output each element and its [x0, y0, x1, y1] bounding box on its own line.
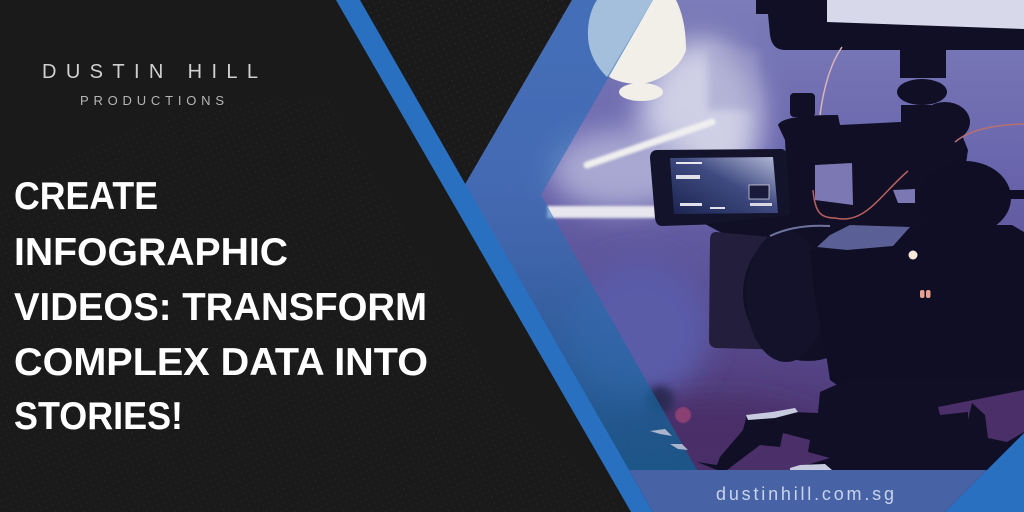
corner triangle	[945, 433, 1024, 512]
overlay highlights	[650, 429, 688, 450]
lower rig	[697, 380, 1024, 470]
small monitor	[650, 149, 790, 226]
title: CREATE	[14, 175, 158, 218]
logo: Dustin Hill Productions: PRODUCTIONS	[80, 93, 224, 108]
photo background	[460, 0, 1024, 480]
blue translucent overlay	[460, 0, 697, 470]
top monitor	[756, 0, 1024, 115]
title: COMPLEX DATA INTO	[14, 341, 428, 384]
title: STORIES!	[14, 395, 183, 438]
logo: Dustin Hill Productions: DUSTIN HILL	[42, 61, 258, 83]
lens hood	[709, 232, 768, 350]
light fixture seen through overlay	[588, 0, 653, 77]
indicator lights	[908, 250, 930, 298]
monitor mount	[706, 220, 786, 237]
camera body and operator	[826, 161, 1024, 384]
dotted texture	[0, 0, 631, 512]
title	[14, 175, 428, 438]
top plate highlight	[817, 225, 910, 250]
gaps in the cage	[815, 163, 915, 205]
blue diagonal stripe	[336, 0, 653, 512]
title: VIDEOS: TRANSFORM	[14, 286, 427, 329]
camera rig and cage	[778, 50, 970, 235]
footer band: dustinhill.com.sg	[716, 484, 894, 504]
logo: Dustin Hill Productions	[42, 61, 258, 108]
rig highlights	[746, 408, 832, 470]
footer band	[629, 470, 987, 512]
cables	[813, 124, 1024, 219]
title: INFOGRAPHIC	[14, 231, 288, 274]
lens	[743, 224, 834, 362]
studio lights	[547, 0, 712, 218]
photo: video camera on set	[460, 0, 1024, 480]
